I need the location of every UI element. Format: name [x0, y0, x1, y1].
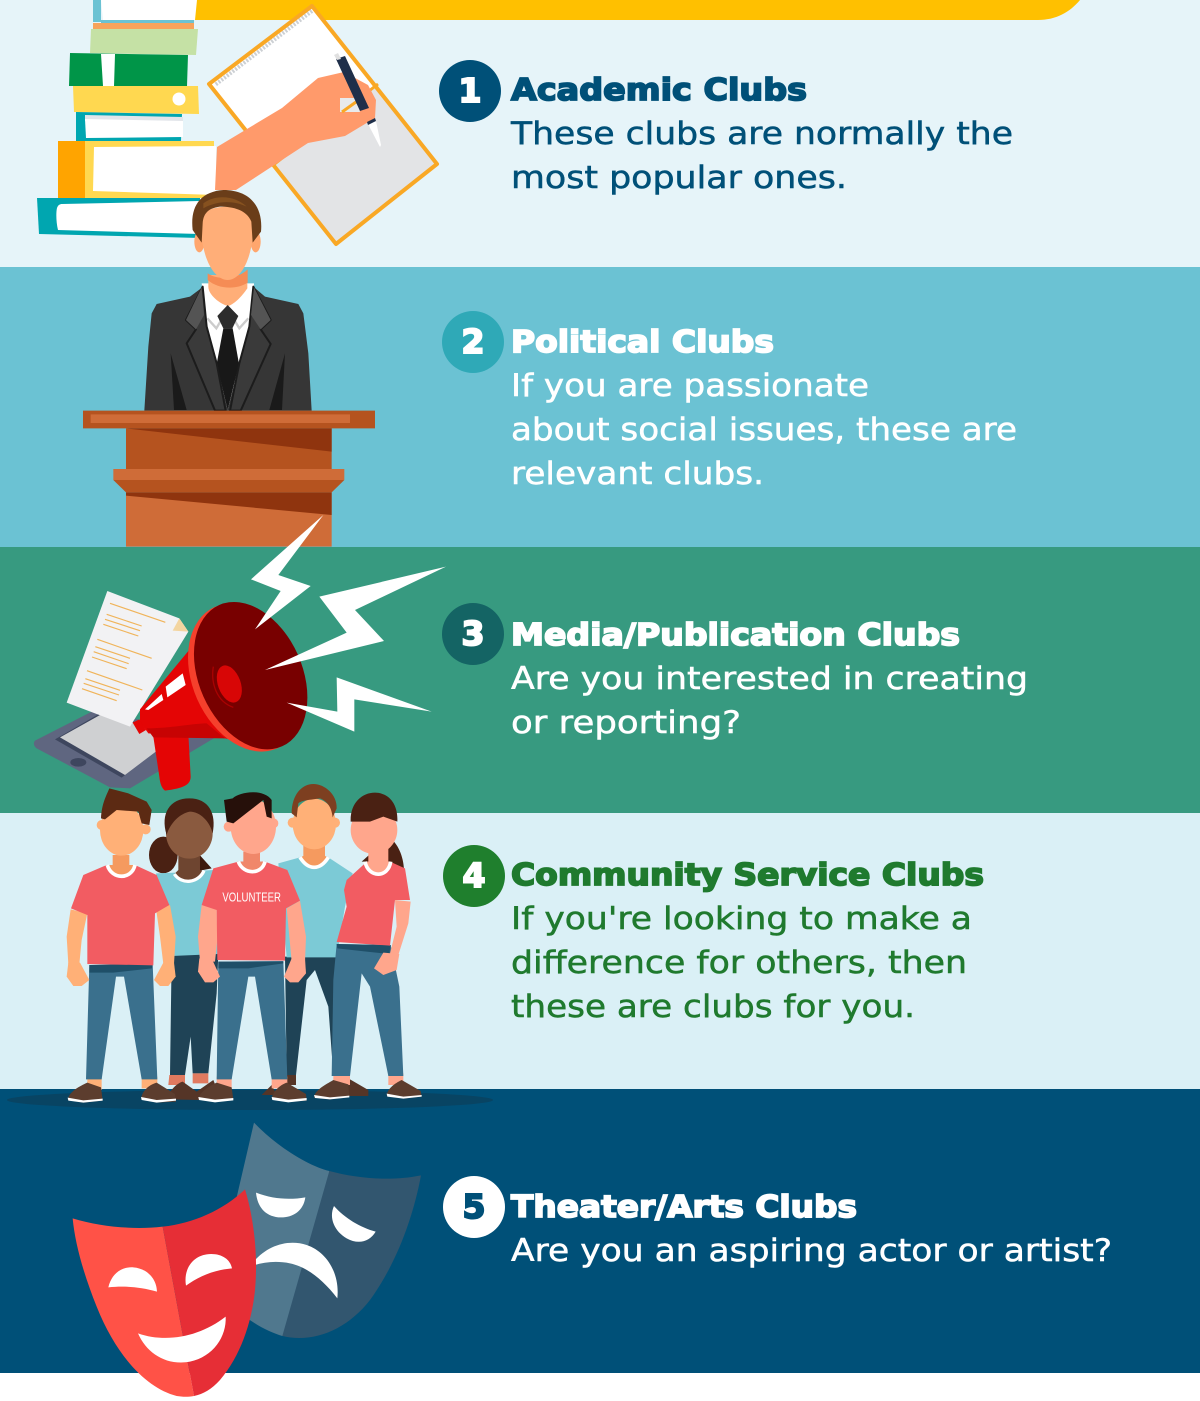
- text: political clubs: relevant clubs.: [511, 456, 764, 492]
- icon: group of volunteers: [67, 784, 422, 1103]
- text: political clubs: [511, 325, 1017, 492]
- icon: hand writing with pen: [215, 53, 381, 190]
- text: political clubs: Political Clubs: [511, 325, 774, 360]
- band: community background: [0, 813, 1200, 1089]
- shadow under volunteers: [7, 1090, 493, 1110]
- number badge 1: [439, 60, 501, 122]
- sad mask: [217, 1123, 421, 1338]
- text: media clubs: or reporting?: [511, 705, 741, 741]
- tablet: [34, 710, 217, 788]
- number badge 5: [443, 1176, 505, 1238]
- text: theater clubs: Are you an aspiring actor or artist?: [511, 1233, 1112, 1269]
- heading: Political: [442, 311, 1017, 492]
- text: academic clubs: Academic Clubs: [511, 73, 807, 108]
- number badge 1: 1: [459, 71, 481, 110]
- text: community clubs: If you're looking to make a: [511, 901, 972, 937]
- person: man in volunteer shirt: VOLUNTEER: [222, 889, 281, 904]
- podium: [83, 411, 375, 547]
- heading: Media: [442, 603, 1028, 741]
- number badge 2: 2: [462, 322, 484, 361]
- number badge 2: [442, 311, 504, 373]
- icon: notebook: [209, 6, 437, 244]
- text: political clubs: If you are passionate: [511, 368, 869, 404]
- text: community clubs: these are clubs for you.: [511, 989, 915, 1025]
- sound bolts: [251, 515, 446, 732]
- number badge 4: [443, 845, 505, 907]
- happy mask: [73, 1189, 256, 1397]
- text: media clubs: [511, 618, 1028, 741]
- person: woman in red, right: [314, 793, 422, 1099]
- text: theater clubs: Theater/Arts Clubs: [511, 1190, 857, 1225]
- band: media background: [0, 547, 1200, 813]
- text: community clubs: [511, 858, 984, 1025]
- document: [67, 591, 188, 727]
- band: academic background: [0, 0, 1200, 267]
- band: political background: [0, 267, 1200, 547]
- text: media clubs: Media/Publication Clubs: [511, 618, 960, 653]
- heading: Community: [443, 845, 984, 1025]
- text: theater clubs: [511, 1190, 1112, 1269]
- icon: tablet, document and megaphone: [34, 515, 446, 791]
- yellow header bar: [195, 0, 1080, 20]
- speaker: [144, 190, 312, 411]
- person: man in volunteer shirt: [198, 792, 307, 1102]
- icon: speaker at podium: [83, 190, 375, 547]
- number badge 4: 4: [463, 856, 485, 895]
- text: media clubs: Are you interested in creating: [511, 661, 1028, 697]
- person: woman in blue, back: [149, 798, 218, 1100]
- icon: stack of books: [37, 0, 216, 238]
- text: academic clubs: most popular ones.: [511, 160, 847, 196]
- text: academic clubs: These clubs are normally the: [510, 116, 1013, 152]
- megaphone: [133, 584, 329, 791]
- number badge 3: 3: [462, 614, 484, 653]
- text: community clubs: Community Service Clubs: [511, 858, 984, 893]
- number badge 3: [442, 603, 504, 665]
- band: theater background: [0, 1089, 1200, 1373]
- heading: Academic: [439, 60, 1013, 196]
- heading: Theater: [443, 1176, 1112, 1269]
- person: man in blue, back: [262, 784, 368, 1096]
- text: academic clubs: [510, 73, 1013, 196]
- number badge 5: 5: [463, 1187, 485, 1226]
- text: political clubs: about social issues, these are: [511, 412, 1017, 448]
- person: man in red, front left: [67, 788, 176, 1103]
- text: community clubs: difference for others, then: [511, 945, 967, 981]
- icon: theater masks: [73, 1123, 421, 1397]
